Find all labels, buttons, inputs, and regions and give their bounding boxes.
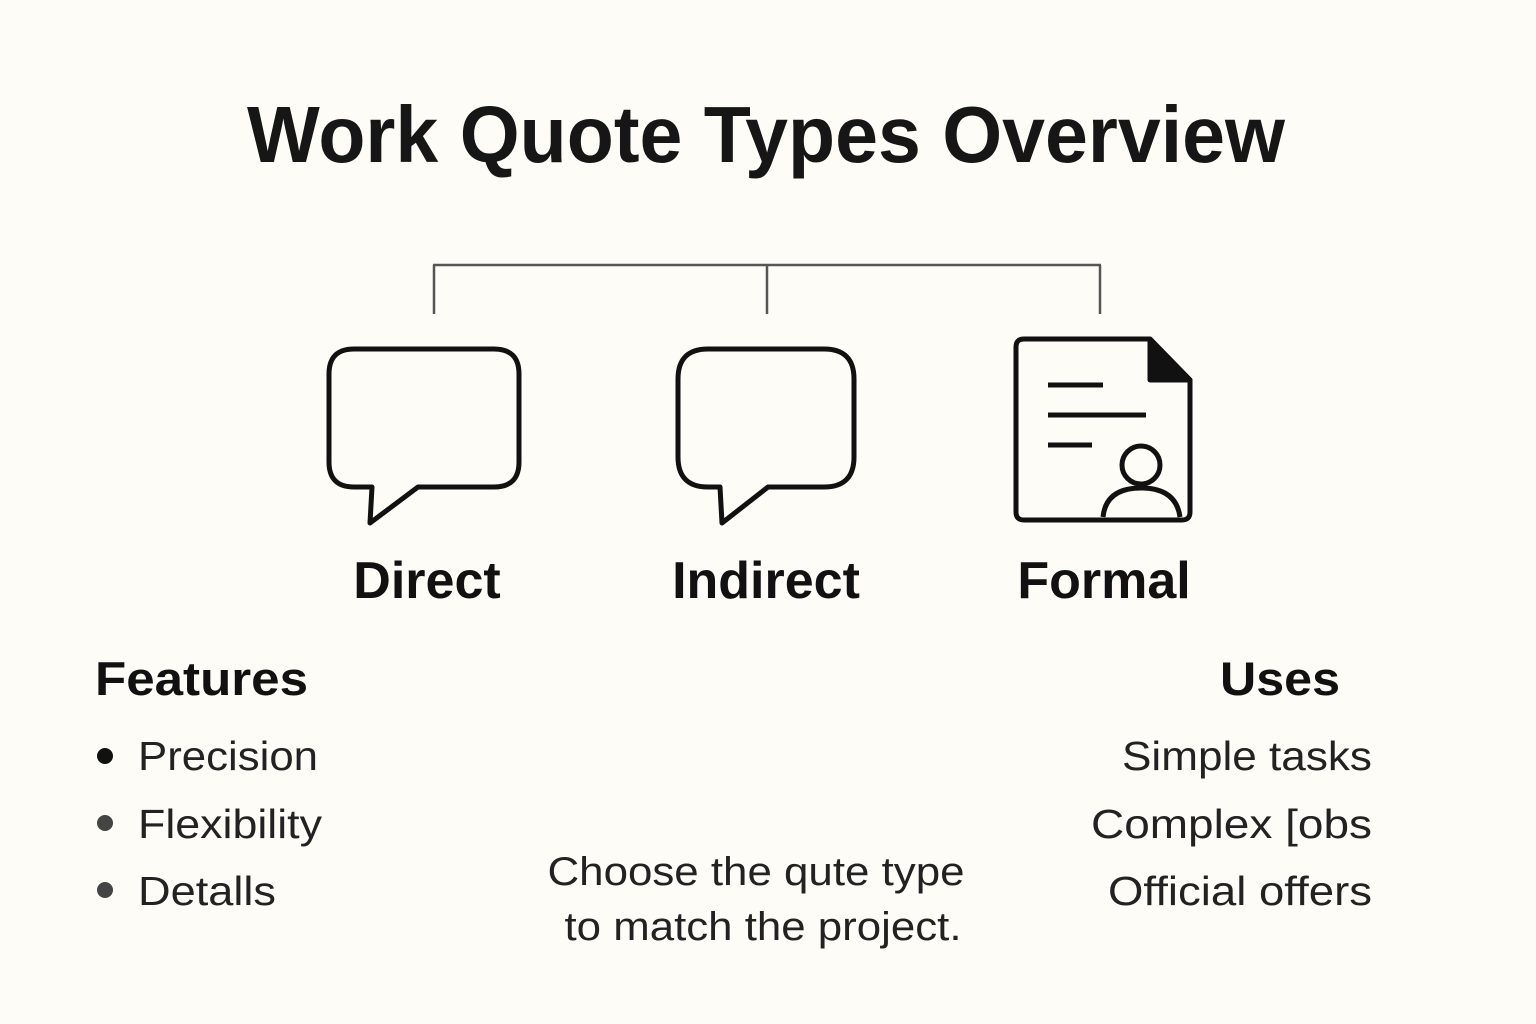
label: Formal: Formal [1017, 552, 1191, 610]
heading: Features: Features [95, 652, 308, 705]
features list: Flexibility [138, 801, 323, 847]
uses list: Simple tasks [1122, 733, 1372, 779]
icon: indirect speech bubble [678, 349, 854, 523]
icon: formal document [1016, 339, 1190, 520]
label: Direct: Direct [353, 552, 501, 610]
footer note: to match the project. [564, 905, 962, 949]
title: Work Quote Types Overview [247, 90, 1286, 179]
features list: Precision [138, 733, 318, 779]
uses list [1091, 733, 1372, 914]
features list [97, 733, 323, 914]
icon: direct speech bubble [329, 349, 519, 523]
tree connector [433, 265, 1101, 314]
heading: Uses: Uses [1220, 652, 1340, 705]
uses list: Complex [obs [1091, 801, 1372, 847]
label: Indirect: Indirect [672, 552, 860, 610]
features list: Detalls [138, 868, 276, 914]
footer note: Choose the qute type [548, 850, 964, 894]
uses list: Official offers [1108, 868, 1372, 914]
footer note [548, 850, 964, 949]
